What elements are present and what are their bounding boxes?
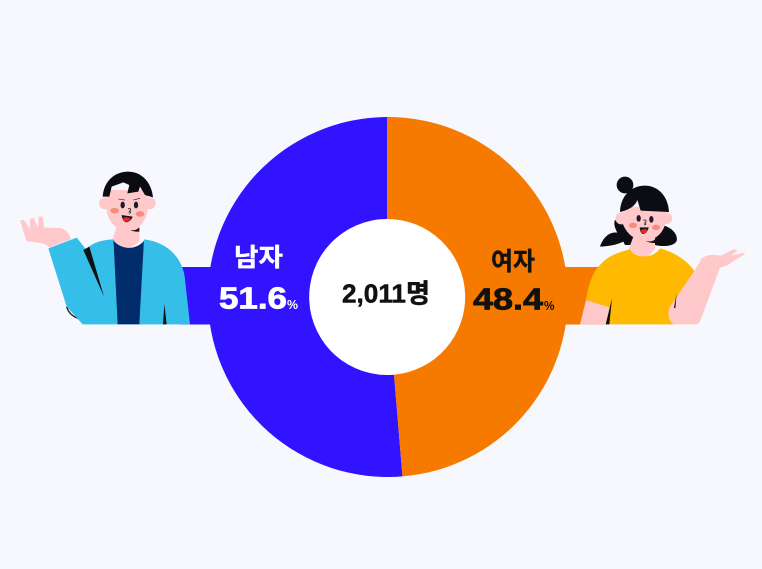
- ears: [99, 197, 111, 209]
- cheeks: [110, 208, 119, 213]
- face: [107, 190, 148, 231]
- female label: 여자: [491, 248, 535, 276]
- segment: female 48.4%: [387, 117, 568, 476]
- female label: %: [544, 298, 555, 313]
- illustration: woman: [580, 177, 745, 324]
- shirt: [113, 240, 144, 324]
- shirt: [586, 248, 694, 324]
- pigtail right: [650, 226, 677, 246]
- jacket left: [48, 238, 118, 324]
- eyebrows: [118, 198, 140, 200]
- donut chart: [208, 117, 568, 477]
- neck: [112, 225, 139, 250]
- hair: [103, 172, 153, 197]
- ears: [615, 212, 627, 224]
- female label: 48.4: [473, 282, 544, 316]
- center hole: [308, 218, 466, 376]
- hand: [20, 217, 71, 247]
- connector bar: male: [180, 267, 220, 324]
- hair bun: [617, 177, 633, 193]
- male label: 51.6: [219, 280, 287, 316]
- left arm: [580, 300, 610, 324]
- mouth: [640, 227, 649, 234]
- female label: [473, 248, 555, 316]
- center total: 2,011명: [342, 278, 430, 308]
- right arm: [668, 249, 745, 324]
- face: [620, 207, 668, 241]
- neck: [628, 235, 655, 260]
- illustration: man: [20, 172, 190, 324]
- hair: [620, 186, 669, 212]
- dark lining: [83, 247, 104, 297]
- nose: [128, 209, 131, 213]
- eyes: [120, 202, 125, 208]
- male label: %: [287, 297, 298, 312]
- pigtail left: [600, 220, 633, 247]
- connector bar: female: [555, 267, 605, 324]
- male label: [219, 244, 298, 316]
- male label: 남자: [234, 244, 283, 272]
- nose: [643, 220, 646, 225]
- segment: male 51.6%: [208, 117, 402, 477]
- eyes: [636, 215, 641, 222]
- cheeks: [629, 223, 637, 228]
- jacket right: [139, 239, 190, 324]
- mouth: [122, 215, 133, 222]
- sleeve curve: [67, 307, 94, 320]
